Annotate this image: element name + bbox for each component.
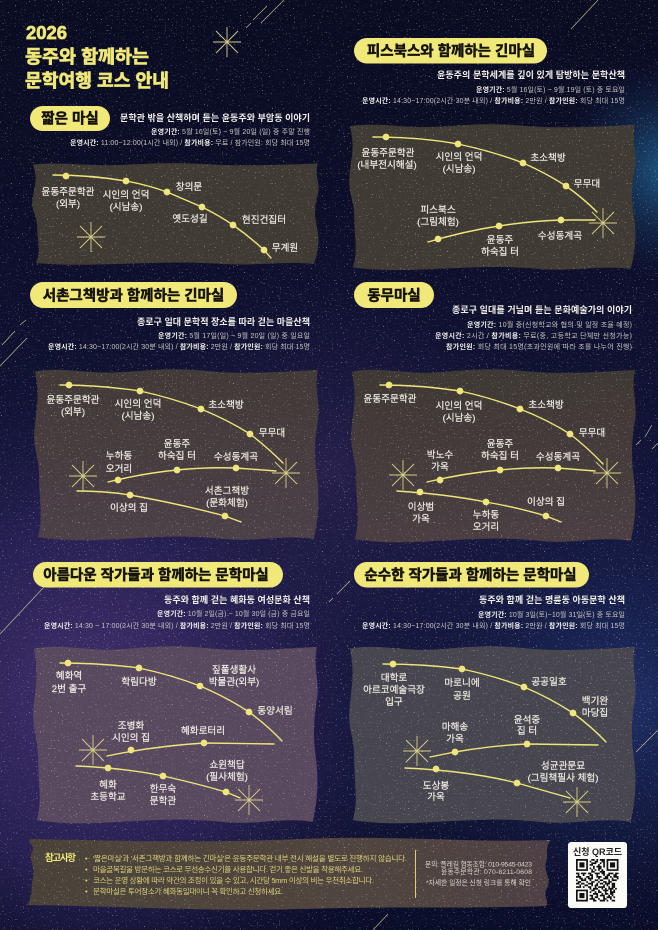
icon: title star <box>213 27 241 57</box>
title <box>25 23 169 91</box>
stop labels <box>357 148 600 258</box>
title: 2026 <box>26 23 67 43</box>
stop labels: (시남송) <box>443 413 475 424</box>
course description <box>362 69 625 105</box>
stop labels: 초소책방 <box>208 400 244 411</box>
pill heading: 순수한 작가들과 함께하는 문학마실 <box>364 567 577 584</box>
course description: 종로구 일대 문학적 장소를 따라 걷는 마을산책 <box>137 316 310 327</box>
section: 동무마실 <box>354 282 632 533</box>
stop labels <box>42 182 298 254</box>
notes list <box>85 853 407 896</box>
stop labels: 초소책방 <box>528 400 564 411</box>
route line middle <box>427 468 595 482</box>
stop labels: 입구 <box>385 696 403 708</box>
pill heading <box>354 38 547 64</box>
stop labels: 오거리 <box>473 522 499 533</box>
course description: 운영시간: 2시간 / 참가비용: 무료(중, 고등학교 단체만 신청가능) <box>435 331 632 340</box>
notes list: • <box>85 887 88 896</box>
stop labels: 쇼윈책답 <box>209 759 245 771</box>
title: 문학여행 코스 안내 <box>25 71 169 91</box>
course description: 운영시간: 14:30~17:00(2시간 30분 내외) / 참가비용: 2만원 / 참가인원: 회당 최대 15명 <box>362 96 625 105</box>
notes list: '짧은마실'과 '서촌그책방과 함께하는 긴마실'은 윤동주문학관 내부 전시 해설을 별도로 진행하지 않습니다. <box>93 853 407 863</box>
pill heading: 짧은 마실 <box>30 106 110 131</box>
stop labels: (그림체험) <box>417 216 459 228</box>
stop labels: 마해송 <box>442 721 468 733</box>
stop labels: 공원 <box>453 691 471 702</box>
stop labels: 시인의 언덕 <box>436 400 482 412</box>
course description: 운영시간: 14:30~17:00(2시간 30분 내외) / 참가비용: 2만원 / 참가인원: 회당 최대 15명 <box>362 621 625 630</box>
pill heading: 피스북스와 함께하는 긴마실 <box>367 43 535 60</box>
icon: star right <box>272 458 300 488</box>
section: 피스북스와 함께하는 긴마실 <box>354 38 625 258</box>
notes list: • <box>85 854 88 863</box>
stop labels: 대학로 <box>381 673 407 684</box>
course description <box>435 304 632 351</box>
stop labels: 시인의 집 <box>112 732 150 744</box>
course description: 윤동주의 문학세계를 깊이 있게 탐방하는 문학산책 <box>437 69 625 80</box>
stop labels: 시인의 언덕 <box>436 151 482 163</box>
notes: 참고사항 <box>45 852 407 896</box>
course description: 운영시간: 14:30~17:00(2시간 30분 내외) / 참가비용: 2만원 / 참가인원: 회당 최대 15명 <box>48 342 310 351</box>
stop labels: 조병화 <box>118 721 144 732</box>
QR code card <box>568 842 627 908</box>
QR card heading: 신청 QR코드 <box>573 846 622 857</box>
stop labels: 서촌그책방 <box>205 486 249 497</box>
route stops <box>65 660 252 795</box>
route stops <box>66 382 253 519</box>
course description <box>44 594 310 630</box>
contact info: *자세한 일정은 신청 링크를 통해 확인 <box>426 878 531 887</box>
icon: star left <box>69 461 97 491</box>
notes list: 마을골목길을 방문하는 코스로 무선송수신기를 사용합니다. 걷기 좋은 신발을 착용해주세요. <box>93 864 363 874</box>
QR code <box>576 860 618 901</box>
stop labels: 수성동계곡 <box>536 452 580 463</box>
icon: star left <box>389 460 417 490</box>
stop labels: 가옥 <box>427 792 445 803</box>
stop labels: 피스북스 <box>420 205 456 216</box>
pill heading <box>33 562 283 588</box>
notes list: 문학마실은 투어장소가 혜화동일대이니 꼭 확인하고 신청하세요. <box>93 886 283 896</box>
contact info: 문의: 플레길 협동조합: 010-9545-0423 <box>425 860 532 868</box>
route line lower <box>77 491 241 522</box>
stop labels: 마로니에 <box>444 678 480 689</box>
pill heading: 짧은 마실: 짧은 마실 <box>41 110 99 128</box>
stop labels: 한무숙 <box>150 784 176 795</box>
icon: star right <box>593 458 621 488</box>
stop labels: 누하동 <box>473 509 499 521</box>
stop labels: 누하동 <box>106 450 132 462</box>
stop labels: 무계원 <box>272 243 298 254</box>
stop labels: 시인의 언덕 <box>103 189 149 201</box>
route line lower <box>397 491 561 522</box>
route line upper <box>60 385 283 463</box>
pill heading <box>30 282 237 308</box>
pill heading: 동무마실 <box>367 288 421 304</box>
course description: 종로구 일대를 거닐며 듣는 문화예술가의 이야기 <box>452 304 632 315</box>
stop labels: (내부전시해설) <box>357 159 417 171</box>
stop labels: 혜화역 <box>56 670 82 682</box>
stop labels <box>363 673 608 803</box>
route line middle <box>107 743 274 756</box>
stop labels: 마당집 <box>582 707 608 719</box>
stop labels: 박물관(외부) <box>209 676 259 688</box>
pill heading: 서촌그책방과 함께하는 긴마실 <box>43 288 224 304</box>
stop labels: 윤동주문학관 <box>362 148 415 159</box>
stop labels: 수성동계곡 <box>538 231 582 242</box>
route stops <box>383 134 569 242</box>
stop labels: 박노수 <box>427 450 453 461</box>
icon: star left <box>79 735 107 765</box>
notes list: • <box>85 865 88 874</box>
stop labels: 윤석중 <box>514 715 540 726</box>
stop labels: 하숙집 터 <box>481 246 519 258</box>
contact info: 윤동주문학관: 070-8211-0608 <box>441 867 532 876</box>
route line lower <box>428 220 595 242</box>
stop labels: 초소책방 <box>530 153 566 164</box>
course description <box>362 594 625 630</box>
section: 짧은 마실 <box>30 106 310 258</box>
stop labels: 도상봉 <box>423 781 449 792</box>
stop labels: 학림다방 <box>121 676 157 688</box>
course description: 운영기간: 5월 17일(일) ~ 9월 20일 (일) 중 일요일 <box>158 331 310 340</box>
stop labels: 이상범 <box>408 502 434 513</box>
route line upper <box>373 137 597 212</box>
stop labels: 하숙집 터 <box>158 450 196 462</box>
route stops <box>386 382 573 519</box>
stop labels: 공공일호 <box>531 677 567 688</box>
title: 동주와 함께하는 <box>25 47 149 67</box>
stop labels: (시남송) <box>110 202 142 213</box>
stop labels: (문화체험) <box>206 498 248 509</box>
notes list: • <box>85 876 88 885</box>
contact info <box>425 860 532 887</box>
route line upper <box>383 664 606 742</box>
stop labels: 가옥 <box>446 734 464 745</box>
stop labels: 윤동주문학관 <box>364 394 417 405</box>
stop labels: 2번 출구 <box>52 684 86 695</box>
stop labels: 혜화 <box>99 779 117 791</box>
stop labels: 시인의 언덕 <box>115 398 161 410</box>
course description: 운영기간: 10월 중(신청학교와 협의 및 일정 조율 예정) <box>467 320 632 329</box>
stop labels: 수성동계곡 <box>214 452 258 463</box>
stop labels: 무무대 <box>574 179 600 190</box>
panel: 아름다운 작가들 map background <box>33 646 318 823</box>
course description: 운영기간: 10월 3일(토)~10월 31일(토) 중 토요일 <box>478 610 625 619</box>
course description: 운영기간: 5월 16일(토) ~ 9월 20일 (일) 중 주말 진행 <box>151 127 310 136</box>
course description: 운영시간: 11:00~12:00(1시간 내외) / 참가비용: 무료 / 참가인원: 회당 최대 15명 <box>70 138 310 147</box>
course description: 운영기간: 10월 2일(금) ~ 10월 30일 (금) 중 금요일 <box>157 609 310 618</box>
pill heading: 아름다운 작가들과 함께하는 문학마실 <box>43 567 269 584</box>
stop labels: 혜화로터리 <box>181 725 225 737</box>
stop labels: 윤동주 <box>487 439 513 450</box>
route line upper <box>380 385 603 464</box>
stop labels: 백기완 <box>582 696 608 707</box>
stop labels: 이상의 집 <box>110 502 148 514</box>
stop labels: 창의문 <box>176 182 202 193</box>
route stops <box>390 661 576 786</box>
pill heading <box>354 562 589 588</box>
stop labels: 윤동주 <box>487 235 513 246</box>
route line upper <box>60 663 282 741</box>
stop labels: (외부) <box>56 198 80 210</box>
icon: star <box>77 222 105 252</box>
stop labels: 오거리 <box>106 464 132 475</box>
course description <box>48 316 310 351</box>
panel: 피스북스 map background <box>349 124 636 270</box>
stop labels: (시남송) <box>122 411 154 422</box>
stop labels: 문학관 <box>150 796 176 807</box>
route stops <box>63 173 267 253</box>
stop labels: 윤동주문학관 <box>42 187 95 198</box>
course description: 참가인원: 회당 최대 15명(초과인원에 따라 조를 나누어 진행) <box>446 342 632 351</box>
course description: 운영기간: 5월 16일(토) ~ 9월 19일 (토) 중 토요일 <box>476 85 625 94</box>
stop labels: 가옥 <box>431 462 449 473</box>
stop labels: (그림책필사 체험) <box>528 772 598 784</box>
stop labels <box>364 394 605 533</box>
stop labels: 무무대 <box>579 428 605 439</box>
stop labels <box>47 395 285 514</box>
stop labels: 짚풀생활사 <box>212 664 256 676</box>
icon: star right <box>563 787 591 817</box>
stop labels: 가옥 <box>412 514 430 525</box>
section: 순수한 작가들과 함께하는 문학마실 <box>354 562 625 817</box>
stop labels: 성균관문묘 <box>541 761 585 772</box>
course description: 문학관 밖을 산책하며 듣는 윤동주와 부암동 이야기 <box>120 112 310 123</box>
panel: 동무마실 map background <box>351 369 636 542</box>
panel: 짧은 마실 map background <box>32 163 319 265</box>
icon: star right <box>235 785 263 815</box>
stop labels: 옛도성길 <box>172 213 208 225</box>
course description <box>70 112 310 147</box>
course description: 운영시간: 14:30 ~ 17:00(2시간 30분 내외) / 참가비용: 2만원 / 참가인원: 회당 최대 15명 <box>44 621 310 630</box>
stop labels: 하숙집 터 <box>481 450 519 462</box>
notes heading: 참고사항 <box>45 852 76 864</box>
stop labels: 윤동주 <box>164 439 190 450</box>
stop labels: (필사체험) <box>206 771 248 783</box>
stop labels: 아르코예술극장 <box>363 685 425 696</box>
pill heading <box>354 282 434 308</box>
route line <box>53 175 271 258</box>
stop labels: (외부) <box>61 406 85 418</box>
stop labels <box>52 664 293 807</box>
stop labels: 현진건집터 <box>242 214 286 226</box>
panel: 순수한 작가들 map background <box>349 646 636 823</box>
course description: 동주와 함께 걷는 혜화동 여성문화 산책 <box>164 594 310 605</box>
course description: 동주와 함께 걷는 명륜동 아동문학 산책 <box>479 594 625 605</box>
notes list: 코스는 운영 상황에 따라 약간의 조정이 있을 수 있고, 시간당 5mm 이상의 비는 우천취소합니다. <box>93 875 374 885</box>
panel: notes band background <box>27 838 551 910</box>
section: 서촌그책방과 함께하는 긴마실 <box>30 282 310 522</box>
stop labels: 초등학교 <box>90 792 126 803</box>
stop labels: (시남송) <box>443 164 475 175</box>
stop labels: 집 터 <box>517 725 537 737</box>
stop labels: 무무대 <box>259 428 285 439</box>
icon: star <box>589 208 617 238</box>
route line lower <box>76 766 240 798</box>
icon: star left <box>403 736 431 766</box>
section: 아름다운 작가들과 함께하는 문학마실 <box>33 562 310 815</box>
route line middle <box>108 468 276 482</box>
stop labels: 동양서림 <box>257 705 293 717</box>
route line middle <box>430 744 598 757</box>
route line lower <box>405 768 570 798</box>
stop labels: 윤동주문학관 <box>47 395 100 406</box>
panel: 서촌그책방 map background <box>34 369 319 540</box>
stop labels: 이상의 집 <box>527 496 565 508</box>
